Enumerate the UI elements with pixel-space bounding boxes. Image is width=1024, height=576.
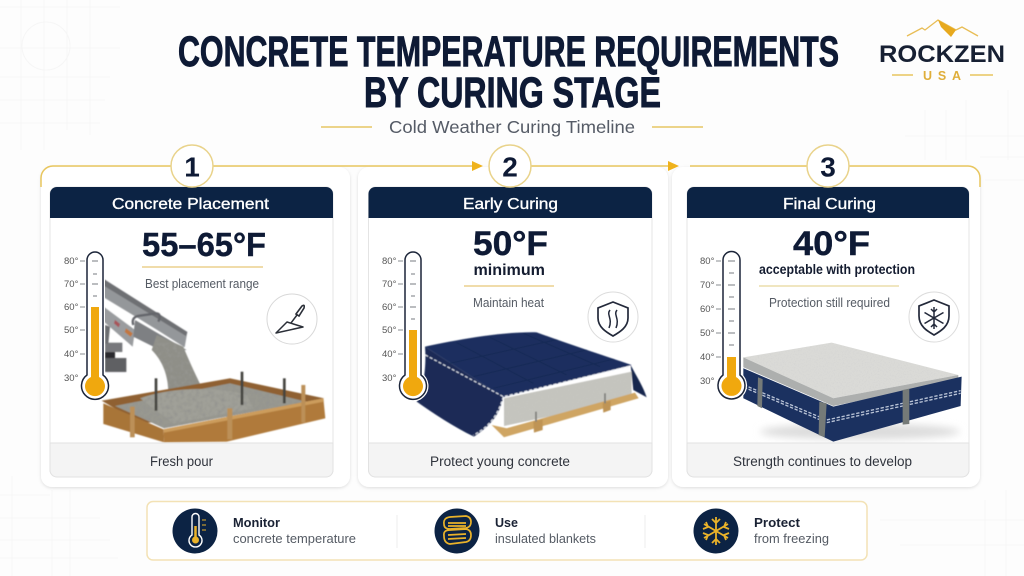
stage 1 footer xyxy=(50,443,333,477)
title xyxy=(178,28,839,117)
tip: blankets xyxy=(434,508,596,554)
logo: Rockzen USA xyxy=(879,20,1005,83)
thermometer: 50 degrees: 60° xyxy=(382,302,397,313)
step 1 xyxy=(171,145,213,187)
step 3: 3 xyxy=(820,152,836,182)
thermometer: 60 degrees: 80° xyxy=(64,256,79,267)
thermometer: 60 degrees: 60° xyxy=(64,302,79,313)
thermometer: 40 degrees: 70° xyxy=(700,280,715,291)
panel: stage 2 early curing xyxy=(358,167,668,487)
icon: frost shield xyxy=(909,292,959,342)
thermometer: 40 degrees: 80° xyxy=(700,256,715,267)
stage 3 header xyxy=(687,187,969,218)
stage 2 reading: minimum xyxy=(474,262,545,279)
title: BY CURING STAGE xyxy=(364,69,661,117)
thermometer: 50 degrees: 80° xyxy=(382,256,397,267)
tip: freezing: from freezing xyxy=(754,532,829,546)
icon: heat shield xyxy=(588,292,638,342)
stage 2 illustration: insulated blanket xyxy=(417,332,647,437)
stage 2 header xyxy=(368,187,652,218)
thermometer: 60 degrees: 30° xyxy=(64,373,79,384)
stage 3 header: Final Curing xyxy=(783,196,876,213)
thermometer: 60 degrees: 40° xyxy=(64,349,79,360)
tip: freezing: Protect xyxy=(754,516,801,530)
thermometer: 40 degrees: 40° xyxy=(700,352,715,363)
step 2 xyxy=(489,145,531,187)
subtitle: Cold Weather Curing Timeline xyxy=(389,117,635,137)
stage 1 header: Concrete Placement xyxy=(112,196,270,213)
thermometer: 60 degrees: 70° xyxy=(64,279,79,290)
stage 3 reading: 40°F xyxy=(793,225,870,263)
stage 3 footer xyxy=(687,443,969,477)
tip: blankets: Use xyxy=(495,516,518,530)
stage 2 footer: Protect young concrete xyxy=(430,454,570,469)
tip: freezing xyxy=(694,508,829,554)
tip: monitor xyxy=(172,508,356,554)
thermometer: 50 degrees: 40° xyxy=(382,349,397,360)
thermometer: 50 degrees: 50° xyxy=(382,325,397,336)
stage 1 reading: Best placement range xyxy=(145,277,259,291)
step 1: 1 xyxy=(184,152,200,182)
stage 2 footer xyxy=(368,443,652,477)
panel: stage 3 final curing xyxy=(672,167,980,487)
tip: monitor: concrete temperature xyxy=(233,532,356,546)
thermometer: 40 degrees: 60° xyxy=(700,304,715,315)
stage 2 reading: Maintain heat xyxy=(473,296,544,310)
thermometer: 60 degrees xyxy=(64,252,108,399)
logo: Rockzen USA: USA xyxy=(923,69,961,83)
stage 1 footer: Fresh pour xyxy=(150,454,213,469)
logo: Rockzen USA: ROCKZEN xyxy=(879,41,1005,68)
thermometer: 40 degrees xyxy=(700,252,745,399)
thermometer: 50 degrees: 70° xyxy=(382,279,397,290)
stage 3 reading: Protection still required xyxy=(769,296,890,310)
stage 3 reading xyxy=(759,225,915,310)
thermometer: 60 degrees: 50° xyxy=(64,325,79,336)
stage 1 reading xyxy=(142,227,266,291)
panel: bottom tips bar xyxy=(147,502,867,560)
thermometer: 40 degrees: 50° xyxy=(700,328,715,339)
thermometer: 50 degrees: 30° xyxy=(382,373,397,384)
thermometer: 50 degrees xyxy=(382,252,426,399)
stage 2 header: Early Curing xyxy=(463,196,558,213)
stage 1 header xyxy=(50,187,333,218)
stage 2 reading: 50°F xyxy=(473,225,548,263)
panel: stage 1 concrete placement xyxy=(41,167,350,487)
icon: trowel xyxy=(267,294,317,344)
stage 3 reading: acceptable with protection xyxy=(759,262,915,277)
thermometer: 40 degrees: 30° xyxy=(700,376,715,387)
timeline with arrows and step numbers xyxy=(41,145,980,187)
tip: blankets: insulated blankets xyxy=(495,532,596,546)
tip: monitor: Monitor xyxy=(233,516,280,530)
stage 1 reading: 55–65°F xyxy=(142,227,266,264)
step 3 xyxy=(807,145,849,187)
step 2: 2 xyxy=(502,152,518,182)
stage 1 illustration: concrete pour xyxy=(102,278,325,442)
stage 3 footer: Strength continues to develop xyxy=(733,454,912,469)
stage 3 illustration: protected slab xyxy=(743,343,962,442)
stage 2 reading xyxy=(464,225,554,310)
